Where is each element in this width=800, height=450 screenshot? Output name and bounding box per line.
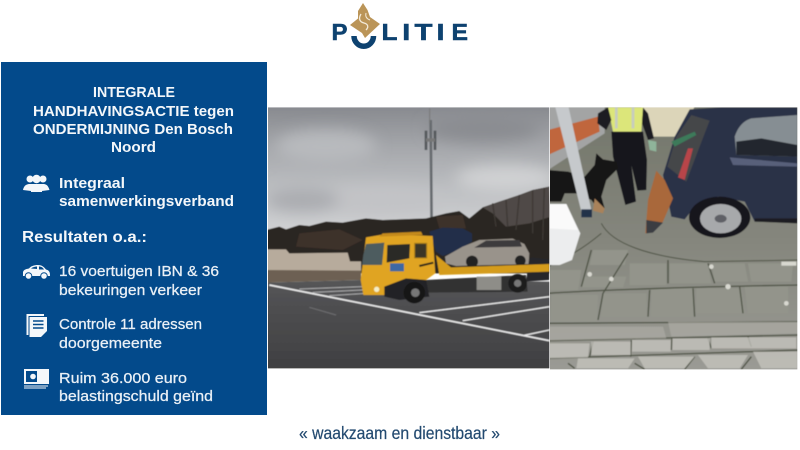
heading: HANDHAVINGSACTIE tegen	[33, 103, 234, 120]
treeline	[266, 187, 551, 273]
icon: car	[23, 265, 50, 279]
icon: banknotes	[24, 369, 49, 388]
logo wordmark: E	[452, 19, 468, 45]
text: addresses: Controle 11 adressen	[59, 316, 202, 333]
text: tax debt: belastingschuld geïnd	[59, 388, 213, 405]
parking lines	[269, 285, 549, 341]
icon: document	[26, 314, 47, 337]
heading: INTEGRALE	[93, 84, 175, 101]
wall	[548, 107, 605, 170]
logo ring	[354, 36, 374, 46]
asphalt	[266, 280, 551, 370]
logo emblem	[350, 3, 380, 38]
pole	[555, 107, 591, 212]
text: tax debt	[59, 370, 213, 405]
text: partnership: Integraal	[59, 175, 125, 192]
text: partnership	[59, 175, 234, 210]
heading	[33, 84, 234, 156]
truck	[436, 255, 549, 275]
icon: people	[23, 175, 50, 192]
text: vehicles: bekeuringen verkeer	[59, 282, 202, 299]
text: addresses	[59, 316, 202, 352]
logo wordmark: I	[436, 19, 444, 45]
heading: ONDERMIJNING Den Bosch	[33, 121, 233, 138]
wall	[266, 249, 361, 274]
white box	[548, 204, 580, 265]
logo wordmark: I	[402, 19, 410, 45]
text: partnership: samenwerkingsverband	[59, 193, 234, 210]
grey car on truck	[445, 239, 529, 266]
panel: results	[1, 62, 267, 415]
text: vehicles	[59, 263, 219, 299]
heading: Noord	[111, 139, 156, 156]
paving stones	[550, 250, 792, 284]
photo: tow truck on parking lot	[266, 107, 556, 370]
logo wordmark: L	[382, 19, 398, 45]
blue car on truck	[429, 228, 472, 256]
car body	[663, 107, 797, 222]
logo wordmark: P	[332, 19, 348, 45]
slogan: « waakzaam en dienstbaar »	[299, 423, 500, 443]
tower	[431, 120, 432, 230]
text: vehicles: 16 voertuigen IBN & 36	[59, 263, 219, 280]
subheading: results: Resultaten o.a.:	[22, 229, 147, 246]
logo wordmark	[332, 19, 468, 45]
text: tax debt: Ruim 36.000 euro	[59, 370, 187, 387]
logo: Politie	[332, 3, 468, 46]
wheel	[689, 197, 750, 238]
orange board	[645, 171, 673, 233]
dog	[548, 153, 618, 208]
logo wordmark: T	[414, 19, 432, 45]
paving joints	[548, 223, 800, 369]
photo: police dog searching car	[548, 107, 800, 373]
text: addresses: doorgemeente	[59, 335, 162, 352]
person	[611, 132, 647, 205]
